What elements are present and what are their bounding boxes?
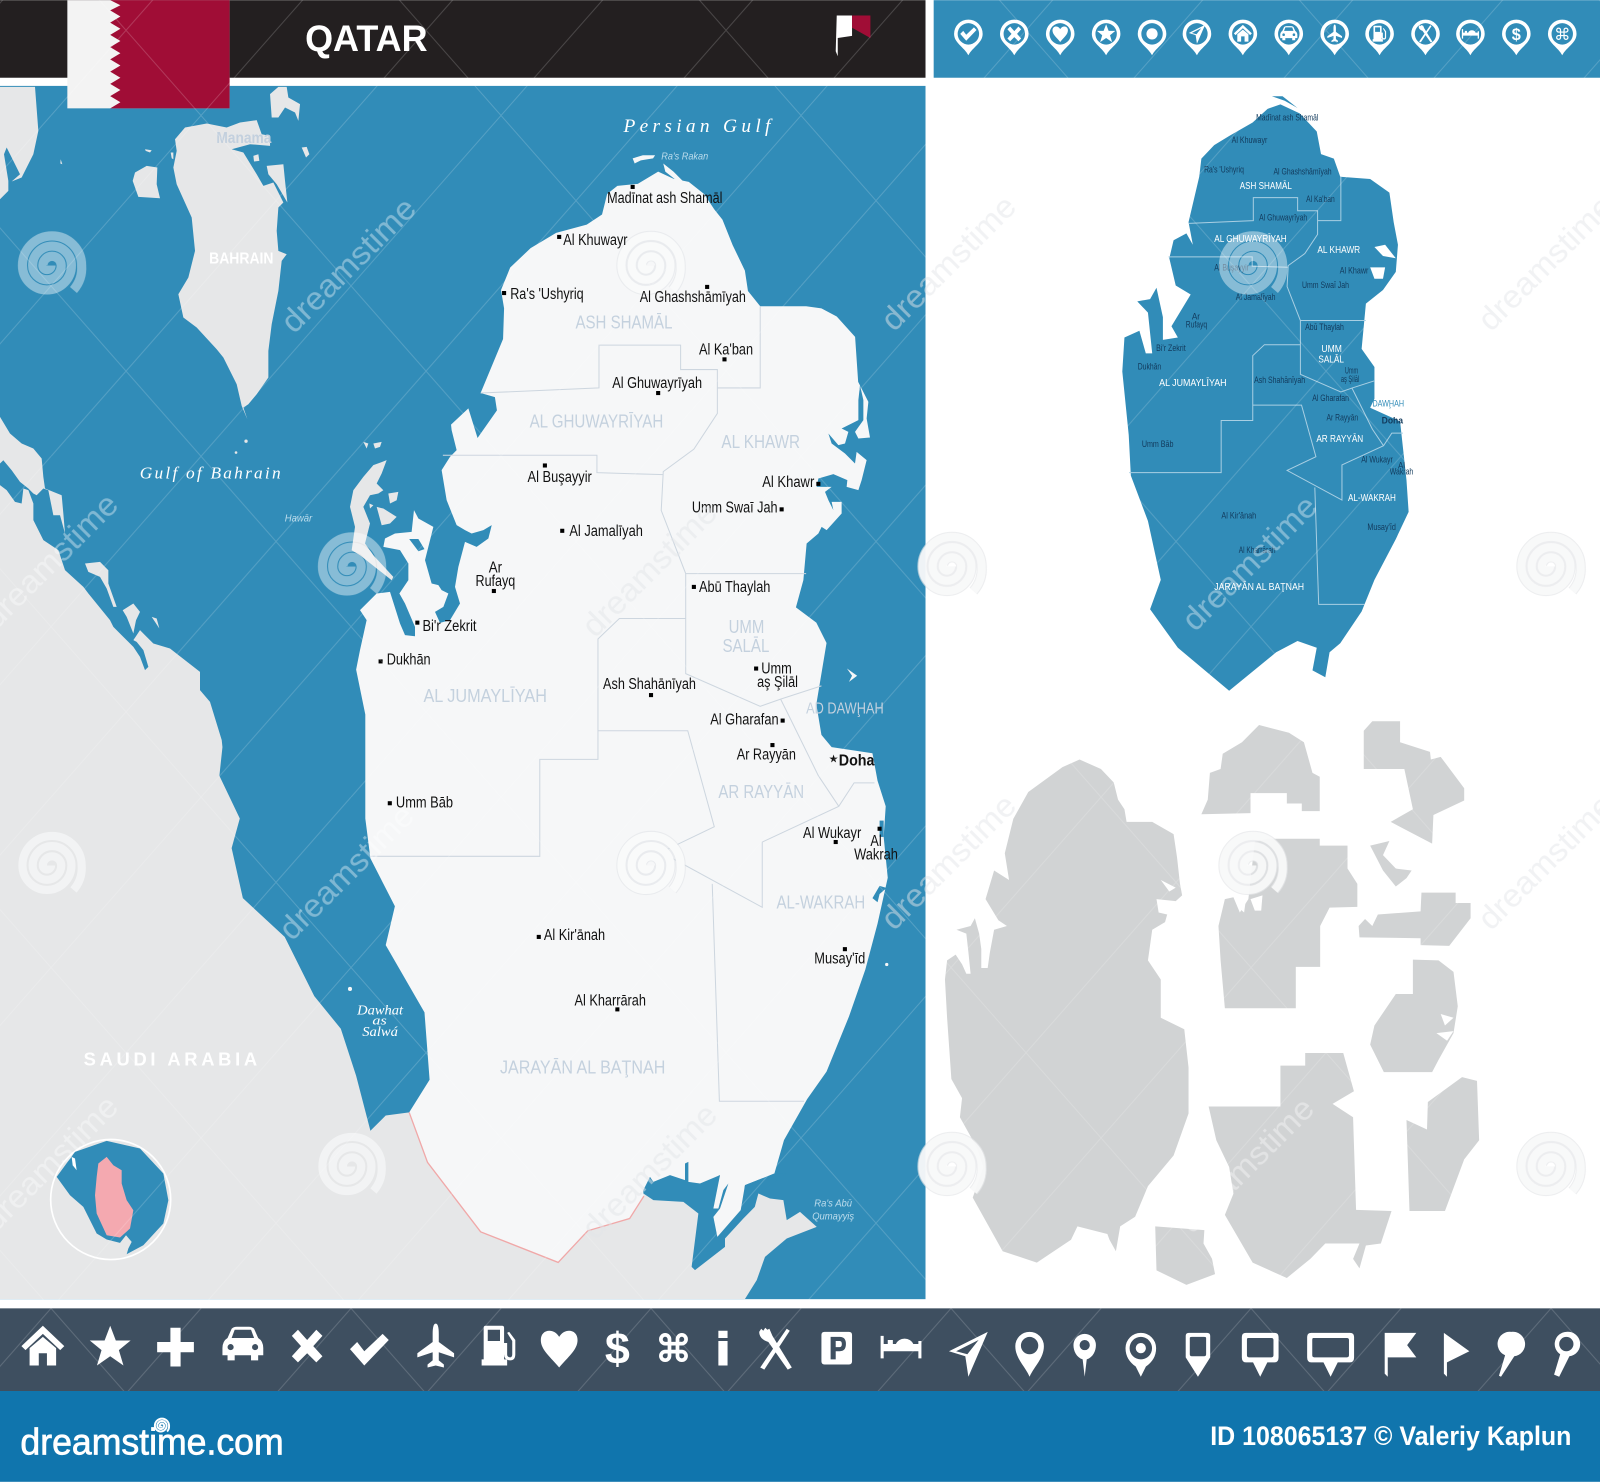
inset locator globe — [51, 1140, 171, 1260]
Qatar highlight — [95, 1157, 133, 1238]
dark city labels: Al Ghuwayrīyah — [1259, 213, 1307, 223]
pin: home — [1229, 20, 1257, 55]
dark city labels: Al Khawr — [1340, 266, 1368, 276]
pin: dollar — [1502, 20, 1531, 55]
city: Umm as Silal: Umm — [761, 661, 792, 678]
pin: check — [954, 20, 983, 55]
city: Ar Rufayq — [476, 560, 515, 593]
label: Saudi Arabia: SAUDI ARABIA — [84, 1048, 257, 1069]
district: Al Jumayliyah: AL JUMAYLĪYAH — [423, 685, 547, 706]
dark city labels: Al Buşayyir — [1214, 263, 1249, 273]
label: Hawar: Hawār — [285, 514, 313, 525]
district: Jarayan al Batnah: JARAYĀN AL BAŢNAH — [500, 1057, 665, 1078]
dark city labels: Bi'r Zekrit — [1156, 343, 1186, 353]
dark city labels: Rufayq — [1186, 320, 1207, 330]
icon: parking — [821, 1332, 852, 1364]
label: Ra's Rakan: Ra's Rakan — [661, 151, 708, 162]
white district labels: UMM — [1321, 344, 1342, 355]
dark city labels: Umm Bāb — [1142, 439, 1173, 449]
map labels: cities — [379, 185, 898, 1011]
city: Al Wakrah — [854, 827, 898, 863]
city: Doha: ★ — [829, 753, 839, 765]
watermark text: dreamstime — [873, 786, 1023, 937]
watermark text: dreamstime — [1174, 487, 1324, 638]
watermark text: dreamstime — [271, 797, 421, 947]
pin: cross — [1000, 20, 1029, 55]
city: Al Khuwayr: Al Khuwayr — [563, 232, 628, 249]
white district labels: AL-WAKRAH — [1348, 493, 1396, 504]
label: Dawhat as Salwa: Dawhat — [356, 1002, 403, 1017]
watermark text: dreamstime — [873, 187, 1023, 338]
icon: flag — [1385, 1333, 1416, 1377]
pin: car — [1274, 20, 1303, 55]
pin: command — [1548, 20, 1577, 55]
label: Dawhat as Salwa — [356, 1002, 403, 1039]
city: Ar Rufayq: Rufayq — [476, 573, 515, 590]
district: Al Khawr: AL KHAWR — [721, 431, 800, 452]
label: Dawhat as Salwa: as — [372, 1014, 387, 1028]
city: Umm Swai Jah: Umm Swaī Jah — [692, 499, 778, 516]
icon: info — [718, 1331, 728, 1365]
panel: top pin icon bar — [934, 0, 1600, 78]
district: Ar Rayyan: AR RAYYĀN — [718, 781, 804, 802]
dark city labels: Ar — [1192, 312, 1200, 322]
title: QATAR — [305, 18, 428, 59]
dark city labels: Madīnat ash Shamāl — [1256, 113, 1318, 123]
watermark spirals on the right panels — [922, 236, 1581, 1191]
watermark text: dreamstime — [273, 189, 423, 340]
pin: navigation — [1183, 20, 1211, 55]
white district labels: JARAYĀN AL BAŢNAH — [1214, 581, 1304, 593]
icon: wide speech pin — [1307, 1333, 1354, 1377]
map labels: seas and neighbours — [84, 116, 854, 1223]
dark city labels: Al Jamalīyah — [1236, 292, 1276, 302]
dark city labels: Umm Swaī Jah — [1302, 280, 1349, 290]
white district labels — [1159, 180, 1396, 593]
city: Ra's Ushyriq: Ra's 'Ushyriq — [510, 286, 584, 303]
city: Umm as Silal: aş Şilāl — [757, 674, 798, 691]
city: Madinat ash Shamal — [607, 185, 722, 207]
dark city labels: Ra's 'Ushyriq — [1204, 165, 1244, 175]
flag of Qatar — [67, 0, 230, 108]
white district labels: ASH SHAMĀL — [1240, 180, 1292, 192]
pin: plane — [1320, 20, 1349, 55]
icon: pennant — [1444, 1333, 1469, 1377]
district: Umm Salal: SALĀL — [722, 635, 769, 656]
icon: small flag — [836, 15, 870, 56]
district: Al Ghuwayriyah: AL GHUWAYRĪYAH — [530, 411, 663, 432]
dark city labels: Musay'īd — [1367, 522, 1396, 532]
watermark spirals on the main map — [22, 236, 681, 1191]
icon: magnifier — [1554, 1332, 1580, 1377]
small coastal water — [409, 539, 887, 902]
icon: cross — [292, 1330, 322, 1362]
islets — [348, 155, 888, 991]
dark city labels: Al Ka'ban — [1306, 194, 1335, 204]
label: Ra's Abu Qumayyis: Qumayyiş — [812, 1212, 854, 1223]
icon: fork and knife — [759, 1328, 792, 1370]
city: Al Busayyir: Al Buşayyir — [528, 469, 592, 486]
dark city labels: DAWḨAH — [1372, 398, 1404, 408]
icon: plus — [157, 1328, 194, 1367]
city: Madinat ash Shamal: Madīnat ash Shamāl — [607, 190, 722, 207]
city: Bi'r Zekrit: Bi'r Zekrit — [422, 618, 477, 635]
city: Ar Rayyan: Ar Rayyān — [737, 746, 796, 763]
white district labels: AR RAYYĀN — [1316, 433, 1363, 445]
pin: fork and knife — [1411, 20, 1440, 55]
city: Al Ghashshamiyah — [640, 285, 746, 306]
label: Bahrain: BAHRAIN — [209, 250, 273, 267]
icon: fuel — [482, 1326, 515, 1365]
city: Al Jamaliyah: Al Jamalīyah — [569, 523, 643, 540]
header bar — [0, 0, 926, 78]
pin: fuel — [1365, 20, 1394, 55]
district shape: Umm Salal — [1359, 893, 1471, 946]
panel: bottom icon bar — [0, 1308, 1600, 1391]
Hawar islands — [350, 442, 398, 580]
city: Al Khawr: Al Khawr — [762, 474, 814, 491]
icon: push pin — [1498, 1332, 1525, 1377]
white district labels: AL JUMAYLĪYAH — [1159, 377, 1227, 389]
city: Al Kharrarah: Al Kharrārah — [574, 992, 646, 1009]
icon: map pin — [1015, 1332, 1044, 1377]
city: Abu Thaylah: Abū Thaylah — [699, 579, 770, 596]
footer band — [0, 1391, 1600, 1482]
white district labels: SALĀL — [1318, 353, 1344, 365]
dark city labels: Abū Thaylah — [1305, 322, 1344, 332]
dark city labels: aş Şilāl — [1341, 374, 1359, 384]
white district labels: AL KHAWR — [1317, 245, 1360, 256]
city: Umm Bab: Umm Bāb — [396, 794, 453, 811]
city: Dukhan: Dukhān — [387, 651, 431, 668]
dark city labels: Al Wukayr — [1361, 454, 1393, 464]
district boundaries — [370, 306, 874, 1101]
icon: dollar: $ — [605, 1322, 630, 1373]
district shape: Al Khawr — [1370, 960, 1458, 1072]
dreamstime logo: dreamstime.com — [20, 1421, 284, 1462]
dark city labels: Al Gharafan — [1312, 393, 1349, 403]
Bahrain and north-west land — [0, 87, 309, 419]
Khawr al Udayd inlet — [643, 1162, 787, 1270]
city: Al Wakrah: Al — [870, 833, 882, 850]
district shape: Al Ghuwayriyah — [1364, 721, 1464, 844]
dark city labels: Umm — [1345, 366, 1358, 376]
border line Qatar-Saudi — [409, 1112, 644, 1262]
icon: heart — [541, 1331, 578, 1368]
city: Doha: Doha — [839, 752, 875, 769]
district: Al-Wakrah: AL-WAKRAH — [777, 891, 865, 912]
gray silhouette of Qatar — [945, 759, 1189, 1263]
icon: command: ⌘ — [655, 1327, 692, 1370]
district shape: Ar Rayyan — [1155, 1226, 1215, 1285]
Qatar land — [356, 172, 888, 1262]
district: Umm Salal: UMM — [729, 616, 764, 637]
city: Al Ka'ban: Al Ka'ban — [699, 341, 753, 358]
label: Manama: Manama — [216, 130, 272, 147]
label: Ra's Abu Qumayyis: Ra's Abū — [814, 1198, 852, 1209]
Saudi coastal spits and islands — [0, 417, 248, 634]
dark city labels: Al Kharrārah — [1239, 545, 1276, 555]
label: Persian Gulf: Persian Gulf — [622, 116, 773, 137]
pin: star — [1092, 20, 1120, 55]
watermark text: dreamstime — [1171, 1089, 1321, 1240]
city: Al Wakrah: Wakrah — [854, 846, 898, 863]
watermark text: dreamstime — [574, 1096, 724, 1246]
icon: narrow pin — [1073, 1334, 1096, 1377]
city: Al Busayyir — [528, 463, 592, 486]
dark city labels: Al Kir'ānah — [1221, 511, 1256, 521]
district shape: Ad Dawhah — [1370, 841, 1412, 887]
pin: dot — [1138, 20, 1166, 55]
district: Ad Dawhah: AD DAWḨAH — [806, 700, 884, 717]
icon: car — [222, 1327, 263, 1360]
dark city labels: Al — [1398, 461, 1405, 471]
blue district map of Qatar — [1122, 96, 1413, 691]
city: Al Wukayr: Al Wukayr — [803, 825, 861, 842]
image credit: ID 108065137 © Valeriy Kaplun — [1210, 1421, 1571, 1451]
label: Ra's Abu Qumayyis — [812, 1198, 854, 1223]
Saudi Arabia land — [0, 485, 817, 1299]
icon: bed — [881, 1336, 921, 1358]
pin: heart — [1046, 20, 1074, 55]
dark city labels: Doha — [1382, 416, 1404, 426]
watermark text: dreamstime — [574, 494, 724, 644]
district shape: Al Jumayliyah — [1218, 839, 1357, 1008]
city: Ash Shahaniyah: Ash Shahānīyah — [603, 676, 696, 693]
icon: home — [21, 1326, 64, 1365]
city: Ar Rufayq: Ar — [489, 560, 502, 577]
panel: main map — [0, 86, 926, 1299]
district shape: Al-Wakrah — [1406, 1077, 1479, 1211]
icon: target pin — [1126, 1333, 1156, 1377]
city: Ash Shahaniyah — [603, 676, 696, 697]
district shape: Ash Shamal — [1201, 725, 1320, 814]
label: Gulf of Bahrain: Gulf of Bahrain — [140, 464, 281, 483]
dark city labels: Al Ghashshāmīyah — [1273, 167, 1332, 177]
city: Al Ghashshamiyah: Al Ghashshāmīyah — [640, 289, 746, 306]
city: Al Ghuwayriyah: Al Ghuwayrīyah — [612, 375, 702, 392]
dark city labels: Dukhān — [1138, 362, 1161, 372]
dark city labels: Ar Rayyān — [1327, 413, 1358, 423]
dark city labels: Wakrah — [1390, 467, 1413, 477]
gray separated districts — [1155, 721, 1479, 1285]
icon: speech pin — [1242, 1333, 1279, 1377]
dark city labels — [1138, 113, 1413, 555]
pin: bed — [1456, 20, 1485, 55]
city: Musay'id: Musay'īd — [814, 950, 865, 967]
district: Umm Salal — [722, 616, 769, 656]
city: Umm as Silal — [754, 661, 798, 691]
white district labels: AL GHUWAYRĪYAH — [1214, 233, 1287, 245]
icon: check — [350, 1334, 389, 1365]
district shape: Jarayan al Batnah — [1209, 1053, 1392, 1278]
dark city labels: Ash Shahānīyah — [1254, 375, 1305, 385]
icon: plane — [417, 1324, 454, 1368]
icon: navigation arrow — [949, 1332, 988, 1377]
city: Al Gharafan: Al Gharafan — [710, 712, 779, 729]
city: Al Kir'anah: Al Kir'ānah — [544, 927, 605, 944]
pin: dollar: $ — [1512, 26, 1521, 44]
watermark text — [0, 187, 1600, 1246]
label: Dawhat as Salwa: Salwá — [362, 1024, 398, 1039]
district: Ash Shamal: ASH SHAMĀL — [576, 312, 672, 333]
icon: star — [90, 1326, 131, 1365]
icon: rounded pin — [1186, 1333, 1210, 1377]
dark city labels: Al Khuwayr — [1232, 135, 1267, 145]
map labels: districts — [423, 312, 884, 1078]
pin: command: ⌘ — [1554, 25, 1570, 44]
